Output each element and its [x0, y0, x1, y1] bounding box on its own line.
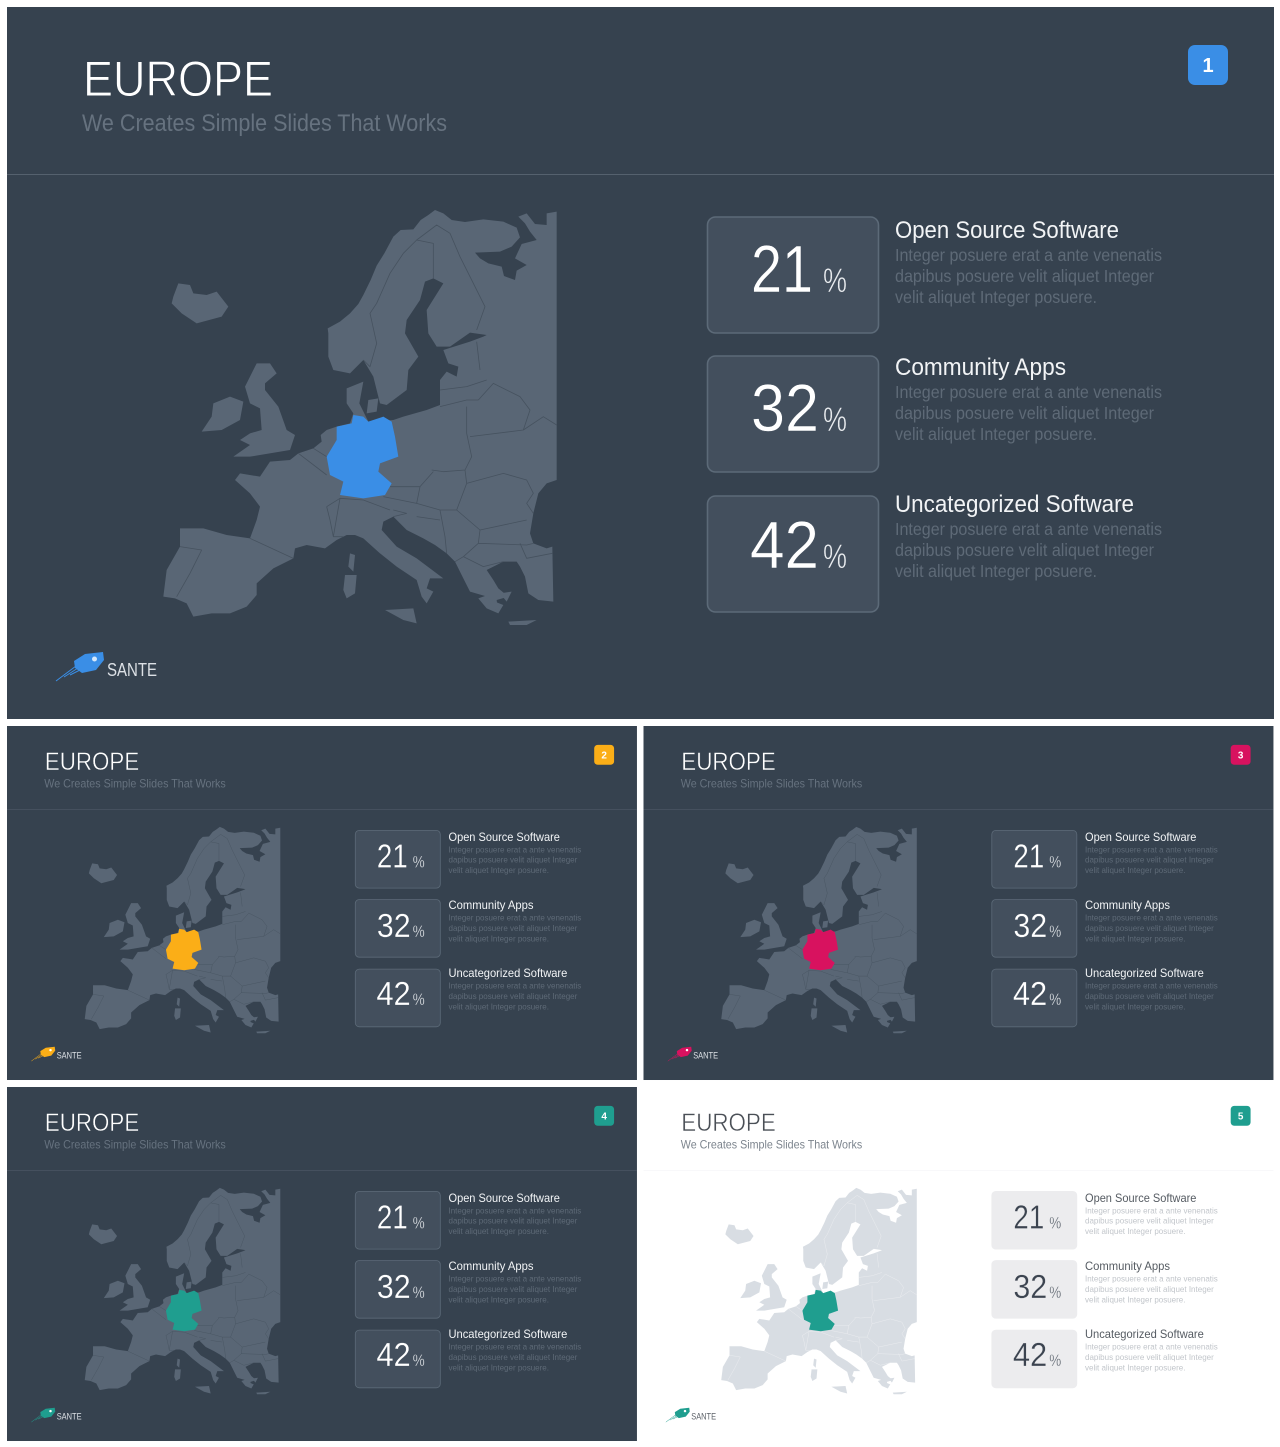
- subtitle: We Creates Simple Slides That Works: [44, 777, 226, 791]
- stat: open source software: %: [413, 1214, 425, 1233]
- subtitle: We Creates Simple Slides That Works: [82, 110, 447, 137]
- badge: slide number: 3: [1238, 750, 1244, 761]
- stat: community apps: Community Apps: [895, 354, 1066, 381]
- panel: slide 1 blue: [7, 7, 1274, 719]
- stat: uncategorized software: [355, 966, 582, 1027]
- map of Europe with Germany highlighted: [721, 827, 917, 1033]
- stat: uncategorized software: Integer posuere erat a ante venenatis: [1085, 1342, 1218, 1352]
- stat: community apps: dapibus posuere velit aliquet Integer: [449, 923, 577, 933]
- stat: uncategorized software: Uncategorized Software: [449, 966, 568, 980]
- stat: open source software: %: [1049, 1214, 1061, 1233]
- logo: rocket and SANTE: [31, 1408, 82, 1422]
- badge: slide number: 4: [601, 1111, 607, 1122]
- stat: community apps: %: [1049, 1283, 1061, 1302]
- stat: open source software: 21: [751, 232, 813, 307]
- stat: community apps: 32: [751, 371, 819, 446]
- stat: community apps: velit aliquet Integer posuere.: [449, 933, 549, 943]
- stat: community apps: velit aliquet Integer posuere.: [895, 424, 1097, 444]
- stat: open source software: 21: [1013, 839, 1044, 876]
- stat: uncategorized software: dapibus posuere velit aliquet Integer: [895, 540, 1154, 560]
- stat: community apps: [355, 1259, 582, 1318]
- stat: uncategorized software: Uncategorized Software: [895, 491, 1134, 518]
- stat: community apps: Integer posuere erat a ante venenatis: [1085, 912, 1218, 922]
- title: EUROPE: [681, 748, 776, 776]
- stat: uncategorized software: velit aliquet Integer posuere.: [449, 1001, 549, 1011]
- stat: open source software: Integer posuere erat a ante venenatis: [1085, 844, 1218, 854]
- stat: uncategorized software: dapibus posuere velit aliquet Integer: [1085, 991, 1214, 1001]
- map of Europe with Germany highlighted: [163, 210, 557, 625]
- panel: slide 2 amber: [7, 726, 637, 1080]
- stat: community apps: Integer posuere erat a ante venenatis: [449, 912, 582, 922]
- stat: community apps: Integer posuere erat a ante venenatis: [449, 1273, 582, 1283]
- title: EUROPE: [45, 1109, 139, 1137]
- stat: open source software: [355, 1191, 582, 1249]
- stat: community apps: Community Apps: [449, 898, 534, 912]
- stat: open source software: dapibus posuere velit aliquet Integer: [449, 855, 577, 865]
- stat: open source software: dapibus posuere velit aliquet Integer: [449, 1216, 577, 1226]
- stat: uncategorized software: dapibus posuere velit aliquet Integer: [1085, 1352, 1214, 1362]
- stat: uncategorized software: velit aliquet Integer posuere.: [449, 1362, 549, 1372]
- logo: rocket and SANTE: SANTE: [693, 1051, 718, 1061]
- stat: community apps: [708, 354, 1162, 472]
- stat: open source software: velit aliquet Integer posuere.: [1085, 1226, 1185, 1236]
- stat: community apps: 32: [1013, 908, 1047, 945]
- stat: community apps: %: [823, 401, 847, 439]
- stat: uncategorized software: Uncategorized Software: [1085, 1327, 1204, 1341]
- stat: community apps: 32: [377, 908, 411, 945]
- stat: open source software: velit aliquet Integer posuere.: [895, 287, 1097, 307]
- stat: community apps: Community Apps: [449, 1259, 534, 1273]
- stat: uncategorized software: Integer posuere erat a ante venenatis: [895, 519, 1162, 539]
- stat: open source software: 21: [377, 839, 408, 876]
- logo: rocket and SANTE: [56, 652, 157, 681]
- stat: community apps: dapibus posuere velit aliquet Integer: [449, 1284, 577, 1294]
- stat: open source software: [355, 830, 582, 888]
- stat: open source software: 21: [377, 1200, 408, 1237]
- subtitle: We Creates Simple Slides That Works: [681, 1138, 862, 1152]
- stat: uncategorized software: dapibus posuere velit aliquet Integer: [449, 1352, 577, 1362]
- stat: open source software: Open Source Software: [449, 830, 560, 844]
- stat: open source software: Integer posuere erat a ante venenatis: [449, 1205, 582, 1215]
- badge: slide number: 2: [601, 750, 607, 761]
- stat: community apps: [992, 898, 1218, 957]
- title: EUROPE: [681, 1109, 776, 1137]
- stat: uncategorized software: [355, 1327, 582, 1388]
- stat: uncategorized software: %: [413, 990, 425, 1009]
- logo: rocket and SANTE: SANTE: [107, 660, 157, 680]
- stat: open source software: velit aliquet Integer posuere.: [449, 865, 549, 875]
- stat: open source software: dapibus posuere velit aliquet Integer: [1085, 1216, 1214, 1226]
- map of Europe with Germany highlighted: [85, 1188, 280, 1394]
- stat: open source software: dapibus posuere velit aliquet Integer: [895, 266, 1154, 286]
- stat: uncategorized software: 42: [1013, 976, 1047, 1013]
- stat: uncategorized software: Integer posuere erat a ante venenatis: [449, 981, 582, 991]
- panel: slide 4 teal dark: [7, 1087, 637, 1441]
- stat: open source software: Open Source Software: [1085, 830, 1197, 844]
- logo: rocket and SANTE: [31, 1047, 82, 1061]
- stat: open source software: velit aliquet Integer posuere.: [449, 1226, 549, 1236]
- stat: uncategorized software: [992, 1327, 1218, 1388]
- map of Europe with Germany highlighted: [721, 1188, 917, 1394]
- stat: uncategorized software: Integer posuere erat a ante venenatis: [449, 1342, 582, 1352]
- title: EUROPE: [45, 748, 139, 776]
- stat: open source software: dapibus posuere velit aliquet Integer: [1085, 855, 1214, 865]
- stat: community apps: velit aliquet Integer posuere.: [449, 1294, 549, 1304]
- stat: uncategorized software: %: [823, 538, 847, 576]
- badge: slide number: [594, 745, 614, 765]
- stat: open source software: Integer posuere erat a ante venenatis: [1085, 1205, 1218, 1215]
- stat: uncategorized software: dapibus posuere velit aliquet Integer: [449, 991, 577, 1001]
- panel: slide 3 pink: [644, 726, 1273, 1080]
- logo: rocket and SANTE: SANTE: [57, 1412, 82, 1422]
- stat: open source software: %: [823, 262, 847, 300]
- stat: open source software: velit aliquet Integer posuere.: [1085, 865, 1185, 875]
- stat: open source software: [992, 830, 1218, 888]
- stat: community apps: 32: [1013, 1269, 1047, 1306]
- stat: open source software: [992, 1191, 1218, 1249]
- stat: community apps: [355, 898, 582, 957]
- stat: open source software: Integer posuere erat a ante venenatis: [895, 245, 1162, 265]
- stat: open source software: %: [1049, 853, 1061, 872]
- stat: uncategorized software: %: [413, 1351, 425, 1370]
- stat: uncategorized software: 42: [1013, 1337, 1047, 1374]
- stat: open source software: [708, 217, 1162, 333]
- stat: community apps: dapibus posuere velit aliquet Integer: [1085, 923, 1214, 933]
- stat: uncategorized software: [992, 966, 1218, 1027]
- stat: uncategorized software: 42: [376, 976, 411, 1013]
- stat: uncategorized software: %: [1049, 1351, 1061, 1370]
- badge: slide number: [1188, 45, 1228, 85]
- stat: uncategorized software: velit aliquet Integer posuere.: [1085, 1362, 1185, 1372]
- badge: slide number: [1231, 745, 1251, 765]
- badge: slide number: 5: [1238, 1111, 1244, 1122]
- stat: community apps: velit aliquet Integer posuere.: [1085, 933, 1185, 943]
- stat: uncategorized software: 42: [750, 508, 819, 583]
- stat: community apps: Community Apps: [1085, 1259, 1170, 1273]
- stat: uncategorized software: Uncategorized Software: [1085, 966, 1204, 980]
- logo: rocket and SANTE: [666, 1408, 716, 1422]
- stat: community apps: Integer posuere erat a ante venenatis: [895, 382, 1162, 402]
- badge: slide number: [594, 1106, 614, 1126]
- badge: slide number: [1231, 1106, 1251, 1126]
- stat: community apps: %: [413, 922, 425, 941]
- subtitle: We Creates Simple Slides That Works: [681, 777, 862, 791]
- stat: uncategorized software: Uncategorized Software: [449, 1327, 568, 1341]
- panel: slide 5 teal light: [644, 1087, 1273, 1441]
- stat: community apps: %: [413, 1283, 425, 1302]
- stat: open source software: %: [413, 853, 425, 872]
- stat: community apps: 32: [377, 1269, 411, 1306]
- stat: uncategorized software: [708, 491, 1162, 612]
- title: EUROPE: [83, 51, 273, 107]
- stat: community apps: %: [1049, 922, 1061, 941]
- stat: open source software: 21: [1013, 1200, 1044, 1237]
- stat: uncategorized software: velit aliquet Integer posuere.: [895, 561, 1097, 581]
- stat: community apps: Community Apps: [1085, 898, 1170, 912]
- stat: community apps: Integer posuere erat a ante venenatis: [1085, 1273, 1218, 1283]
- stat: open source software: Open Source Software: [449, 1191, 560, 1205]
- stat: community apps: [992, 1259, 1218, 1318]
- logo: rocket and SANTE: [668, 1047, 718, 1061]
- stat: open source software: Open Source Software: [1085, 1191, 1197, 1205]
- logo: rocket and SANTE: SANTE: [57, 1051, 82, 1061]
- stat: community apps: velit aliquet Integer posuere.: [1085, 1294, 1185, 1304]
- stat: uncategorized software: 42: [376, 1337, 411, 1374]
- stat: open source software: Open Source Software: [895, 217, 1119, 244]
- stat: community apps: dapibus posuere velit aliquet Integer: [1085, 1284, 1214, 1294]
- subtitle: We Creates Simple Slides That Works: [44, 1138, 226, 1152]
- stat: community apps: dapibus posuere velit aliquet Integer: [895, 403, 1154, 423]
- logo: rocket and SANTE: SANTE: [691, 1412, 716, 1422]
- map of Europe with Germany highlighted: [85, 827, 280, 1033]
- stat: open source software: Integer posuere erat a ante venenatis: [449, 844, 582, 854]
- stat: uncategorized software: velit aliquet Integer posuere.: [1085, 1001, 1185, 1011]
- stat: uncategorized software: %: [1049, 990, 1061, 1009]
- stat: uncategorized software: Integer posuere erat a ante venenatis: [1085, 981, 1218, 991]
- badge: slide number: 1: [1202, 55, 1214, 77]
